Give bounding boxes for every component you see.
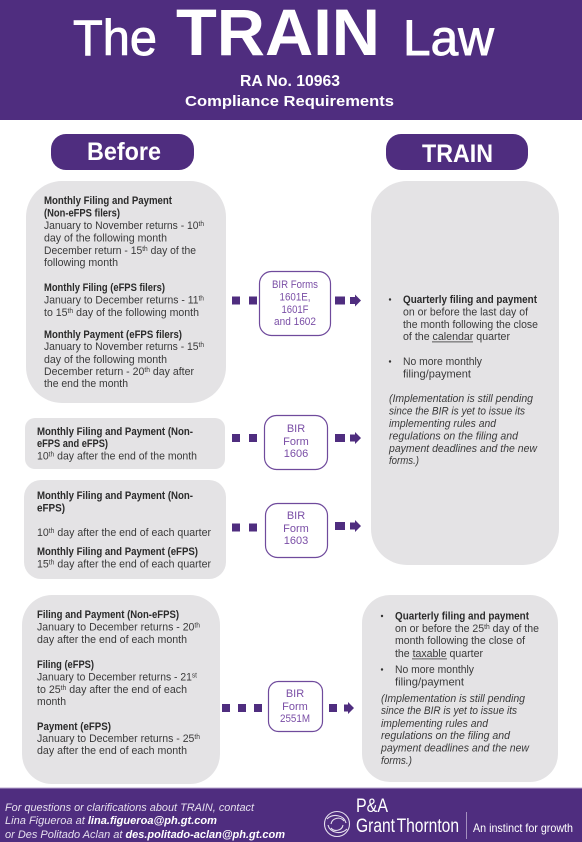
icon: swirl (324, 812, 350, 836)
panel: forms 1601E, 1601F and 1602 before: December return - 15 (44, 245, 149, 257)
panel: TRAIN requirements for withholding forms: of the calendar quarter (403, 331, 510, 343)
panel: TRAIN requirements for form 2551M: day of the (490, 623, 539, 635)
panel: form 1603 before: Monthly Filing and Payment (Non- (37, 490, 193, 502)
form box: BIR Form 1603: 1603 (284, 535, 308, 547)
panel: TRAIN requirements for form 2551M: payment deadlines and the new (380, 742, 530, 754)
panel: form 1603 before: 10 (37, 527, 49, 539)
panel: forms 1601E, 1601F and 1602 before: (Non-eFPS filers) (44, 208, 120, 220)
form box: BIR Form 2551M: Form (282, 701, 308, 713)
panel: forms 1601E, 1601F and 1602 before: th (199, 221, 204, 228)
subtitle: RA No. 10963 (240, 73, 340, 90)
panel: forms 1601E, 1601F and 1602 before: day of the following month (44, 354, 167, 366)
panel: form 2551M before: day after the end of each (66, 684, 187, 696)
panel: form 1606 before: 10 (37, 450, 49, 462)
panel: TRAIN requirements for withholding forms: (Implementation is still pending (389, 393, 534, 405)
panel: form 2551M before: Filing (eFPS) (37, 659, 94, 671)
panel: TRAIN requirements for form 2551M (362, 595, 558, 782)
panel: forms 1601E, 1601F and 1602 before: to 15 (44, 307, 68, 319)
panel: TRAIN requirements for form 2551M: on or before the 25 (395, 623, 488, 635)
panel: form 2551M before: th (61, 685, 66, 692)
form box: BIR Forms 1601E, 1601F and 1602: 1601E, (280, 292, 310, 304)
form box: BIR Form 1603: Form (283, 523, 309, 535)
panel: form 1603 before: 15 (37, 558, 49, 570)
form box: BIR Forms 1601E, 1601F and 1602: and 1602 (274, 316, 316, 328)
subtitle: Compliance Requirements (185, 93, 394, 110)
panel: TRAIN requirements for form 2551M: (Implementation is still pending (381, 693, 526, 705)
panel: form 2551M before: th (194, 622, 200, 630)
arrow: form box 4 to TRAIN panel (329, 702, 354, 714)
logo: P&A Grant Thornton: Grant Thornton (356, 816, 459, 837)
header band (0, 0, 582, 120)
panel: forms 1601E, 1601F and 1602 before: following month (44, 257, 118, 269)
heading: Before (51, 134, 194, 170)
panel: form 2551M before: January to December returns - 21 (37, 672, 201, 684)
panel: form 1606 before: eFPS and eFPS) (37, 438, 108, 450)
panel: TRAIN requirements for withholding forms: regulations on the filing and (389, 430, 519, 442)
panel: TRAIN requirements for form 2551M: implementing rules and (381, 718, 489, 730)
panel: TRAIN requirements for withholding forms: payment deadlines and the new (388, 443, 538, 455)
panel: form 1603 before: Monthly Filing and Payment (eFPS) (37, 546, 198, 558)
arrow: form box 2 to TRAIN panel (335, 432, 361, 444)
title: The (73, 10, 157, 66)
panel: TRAIN requirements for form 2551M: filing/payment (395, 676, 464, 688)
panel: form 2551M before: Payment (eFPS) (37, 721, 111, 733)
panel: form 1603 before: day after the end of each quarter (54, 527, 211, 539)
panel: forms 1601E, 1601F and 1602 before: Monthly Filing and Payment (44, 195, 172, 207)
panel: forms 1601E, 1601F and 1602 before: th (199, 342, 204, 349)
logo: P&A Grant Thornton (324, 796, 573, 839)
panel: forms 1601E, 1601F and 1602 before: th (68, 308, 73, 315)
panel: TRAIN requirements for withholding forms: Quarterly filing and payment (403, 294, 537, 306)
contact text: Lina Figueroa at lina.figueroa@ph.gt.com (5, 815, 217, 827)
arrow: connector into form box 4 (222, 704, 262, 712)
form box: BIR Forms 1601E, 1601F and 1602: BIR Forms (272, 279, 318, 291)
panel: form 2551M before: to 25 (37, 684, 61, 696)
logo: P&A Grant Thornton: An instinct for growth (473, 821, 573, 835)
form box: BIR Forms 1601E, 1601F and 1602: 1601F (282, 304, 309, 316)
panel: form 1606 before (25, 418, 225, 469)
panel: form 2551M before: st (192, 672, 197, 680)
panel: form 1606 before: Monthly Filing and Payment (Non- (37, 426, 193, 438)
panel: forms 1601E, 1601F and 1602 before: January to December returns - 11 (44, 294, 208, 306)
panel: TRAIN requirements for form 2551M: month following the close of (395, 635, 526, 647)
heading: Before: Before (87, 138, 161, 166)
panel: forms 1601E, 1601F and 1602 before: Monthly Filing (eFPS filers) (44, 282, 165, 294)
form box: BIR Form 2551M: 2551M (280, 713, 310, 725)
heading: TRAIN (386, 134, 528, 170)
panel: form 1603 before: eFPS) (37, 502, 65, 514)
panel: form 1606 before: th (49, 452, 54, 458)
panel: form 2551M before: January to December returns - 20 (37, 622, 201, 634)
form box: BIR Form 1606 (264, 416, 328, 470)
panel: form 2551M before: January to December returns - 25 (37, 733, 201, 745)
panel: TRAIN requirements for withholding forms: since the BIR is yet to issue its (389, 406, 525, 418)
panel: forms 1601E, 1601F and 1602 before: Monthly Payment (eFPS filers) (44, 329, 182, 341)
panel: TRAIN requirements for form 2551M: Quarterly filing and payment (395, 610, 529, 622)
panel: form 1603 before (24, 480, 226, 579)
subtitle (185, 73, 394, 110)
form box: BIR Form 2551M (268, 682, 322, 732)
panel: TRAIN requirements for withholding forms (371, 181, 559, 565)
form box: BIR Form 1606: BIR (287, 423, 305, 435)
panel: forms 1601E, 1601F and 1602 before: th (144, 367, 150, 374)
title: Law (403, 10, 495, 66)
footer band (0, 788, 582, 842)
form box: BIR Form 2551M: BIR (286, 688, 304, 700)
contact text: For questions or clarifications about TRAIN, contact (5, 802, 255, 814)
panel: forms 1601E, 1601F and 1602 before: day of the (148, 245, 196, 257)
panel: forms 1601E, 1601F and 1602 before: th (142, 246, 148, 253)
form box: BIR Form 1606: 1606 (284, 448, 308, 460)
panel: form 2551M before: Filing and Payment (Non-eFPS) (37, 609, 179, 621)
panel: TRAIN requirements for withholding forms: on or before the last day of (403, 306, 529, 318)
arrow: connector into form box 3 (232, 524, 257, 532)
form box: BIR Form 1603 (266, 504, 328, 558)
heading: TRAIN: TRAIN (422, 140, 493, 168)
panel: forms 1601E, 1601F and 1602 before: day of the following month (44, 232, 167, 244)
panel: form 2551M before: th (194, 734, 200, 741)
panel: TRAIN requirements for withholding forms: No more monthly (403, 356, 482, 368)
panel: TRAIN requirements for form 2551M: forms.) (381, 755, 412, 767)
panel: form 2551M before: month (37, 696, 66, 708)
arrow: connector into form box 1 (232, 296, 257, 304)
panel: forms 1601E, 1601F and 1602 before: day of the following month (73, 307, 199, 319)
form box: BIR Form 1606: Form (283, 436, 309, 448)
panel: form 1603 before: th (49, 560, 55, 566)
panel: TRAIN requirements for form 2551M: No more monthly (395, 664, 474, 676)
panel: TRAIN requirements for withholding forms: implementing rules and (389, 418, 497, 430)
logo: P&A Grant Thornton: P&A (356, 796, 388, 817)
panel: form 2551M before (22, 595, 220, 784)
panel: TRAIN requirements for form 2551M: the taxable quarter (395, 648, 483, 660)
panel: TRAIN requirements for withholding forms: the month following the close (403, 319, 538, 331)
panel: forms 1601E, 1601F and 1602 before: th (198, 296, 204, 302)
panel: TRAIN requirements for form 2551M: regulations on the filing and (381, 730, 511, 742)
panel: forms 1601E, 1601F and 1602 before: December return - 20 (44, 366, 149, 378)
panel: forms 1601E, 1601F and 1602 before: January to November returns - 15 (44, 341, 208, 353)
panel: forms 1601E, 1601F and 1602 before (26, 181, 226, 403)
panel: TRAIN requirements for withholding forms: forms.) (389, 455, 419, 467)
panel: form 1606 before: day after the end of the month (54, 450, 197, 462)
panel: forms 1601E, 1601F and 1602 before: the end the month (44, 378, 128, 390)
contact text (5, 802, 285, 841)
arrow: connector into form box 2 (232, 434, 257, 442)
panel: forms 1601E, 1601F and 1602 before: January to November returns - 10 (44, 220, 208, 232)
form box: BIR Form 1603: BIR (287, 510, 305, 522)
panel: forms 1601E, 1601F and 1602 before: day after (150, 366, 194, 378)
panel: TRAIN requirements for withholding forms: filing/payment (403, 368, 471, 380)
panel: form 1603 before: th (49, 528, 55, 535)
panel: TRAIN requirements for form 2551M: since the BIR is yet to issue its (381, 705, 517, 717)
panel: TRAIN requirements for form 2551M: th (484, 624, 490, 631)
panel: form 2551M before: day after the end of each month (37, 745, 187, 757)
arrow: form box 3 to TRAIN panel (335, 520, 361, 532)
panel: form 2551M before: day after the end of each month (37, 634, 187, 646)
title (73, 0, 495, 69)
contact text: or Des Politado Aclan at des.politado-aclan@ph.gt.com (5, 829, 285, 841)
panel: form 1603 before: day after the end of each quarter (54, 558, 211, 570)
form box: BIR Forms 1601E, 1601F and 1602 (260, 272, 330, 336)
arrow: form box 1 to TRAIN panel (335, 294, 361, 306)
